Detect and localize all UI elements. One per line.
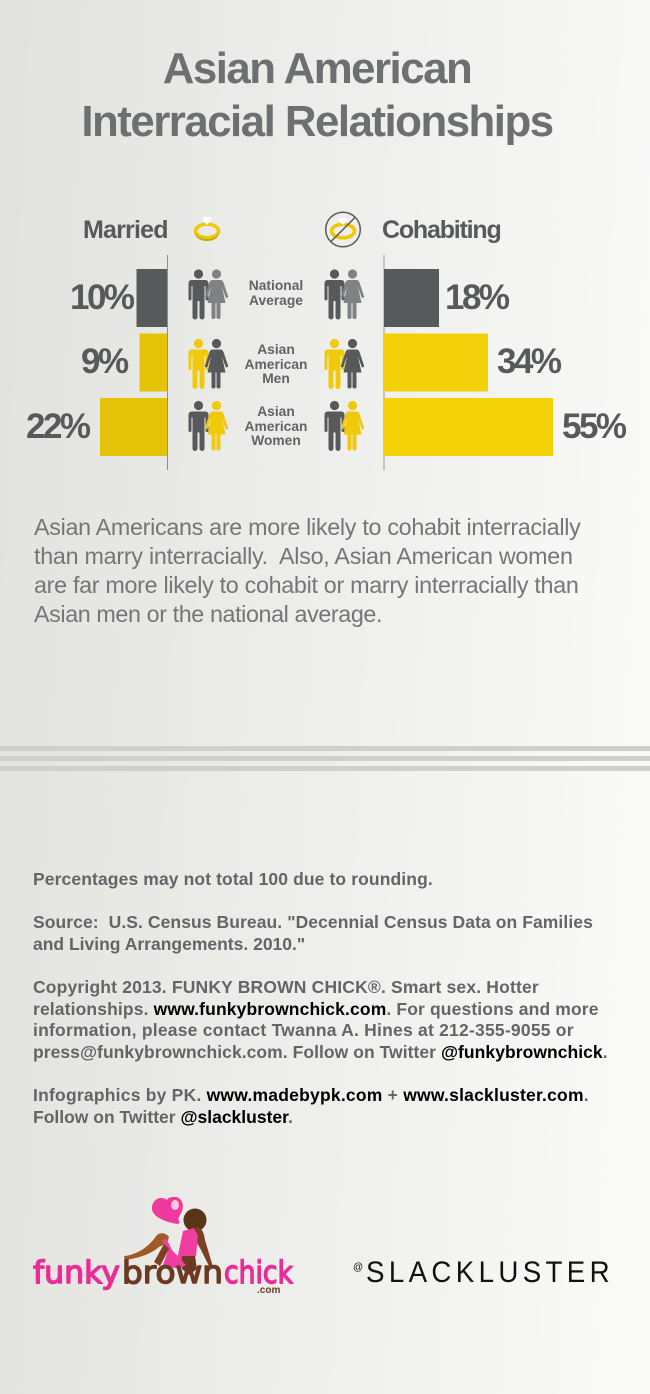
icon: couple Asian men cohabiting [324,339,364,389]
logo: funkybrownchick [33,1197,293,1296]
bar chart: cohabiting: 34% [497,342,562,381]
row labels: Men [262,371,290,386]
bar chart: cohabiting: 55% [562,407,627,446]
row labels: Women [251,433,301,448]
logo: funkybrownchick: funky [33,1255,120,1291]
footnote text: relationships. www.funkybrownchick.com. For questions and more [33,999,599,1019]
row labels: Asian [257,342,295,357]
logo: slackluster: @ [353,1262,363,1273]
footnote text: Copyright 2013. FUNKY BROWN CHICK®. Smart sex. Hotter [33,977,539,997]
footnote text: Follow on Twitter @slackluster. [33,1107,293,1127]
footnote text: Infographics by PK. www.madebypk.com + www.slackluster.com. [33,1085,589,1105]
text block: summary: than marry interracially. Also, Asian American women [34,543,573,569]
row labels: American [245,419,307,434]
icon: couple Asian women married [188,401,228,451]
text block: summary: are far more likely to cohabit or marry interracially than [34,572,579,598]
row labels: American [245,357,307,372]
bar chart: married: 22% [26,407,91,446]
footnote text [33,869,608,1127]
bar chart: cohabiting: 18% [445,278,510,317]
logo: funkybrownchick: chick [224,1255,293,1291]
text block: summary: Asian men or the national average. [34,601,382,627]
logo: funkybrownchick: brown [122,1255,223,1291]
logo: funkybrownchick: .com [257,1285,280,1296]
icon: couple Asian men married [188,339,228,389]
footnote text: press@funkybrownchick.com. Follow on Twitter @funkybrownchick. [33,1042,608,1062]
axis lines [167,255,385,470]
icon: couple national cohabiting [324,269,364,320]
icon: wedding ring [196,217,218,241]
footnote text: and Living Arrangements. 2010." [33,934,305,954]
heading: Married: Married [83,216,168,244]
stripes [0,746,650,771]
row labels: Asian [257,404,295,419]
title [81,44,553,146]
icon: couple national married [188,269,228,320]
title: Asian American [163,44,471,93]
text block: summary: Asian Americans are more likely to cohabit interracially [34,514,581,540]
logo: slackluster: SLACKLUSTER [366,1256,614,1289]
icon: crossed-out ring [326,212,360,247]
bar chart: married [26,269,167,456]
footnote text: Source: U.S. Census Bureau. "Decennial Census Data on Families [33,912,593,932]
row labels: National [249,278,303,293]
footnote text: information, please contact Twanna A. Hines at 212-355-9055 or [33,1020,574,1040]
text block: summary [34,514,581,627]
bar chart: married: 10% [70,278,135,317]
bar chart: married: 9% [81,342,129,381]
row labels: Average [249,293,303,308]
footnote text: Percentages may not total 100 due to rounding. [33,869,433,889]
icon: couple Asian women cohabiting [324,401,364,451]
title: Interracial Relationships [81,97,553,146]
row labels [245,278,307,448]
heading: Cohabiting: Cohabiting [382,216,501,244]
bar chart: cohabiting [384,269,627,456]
